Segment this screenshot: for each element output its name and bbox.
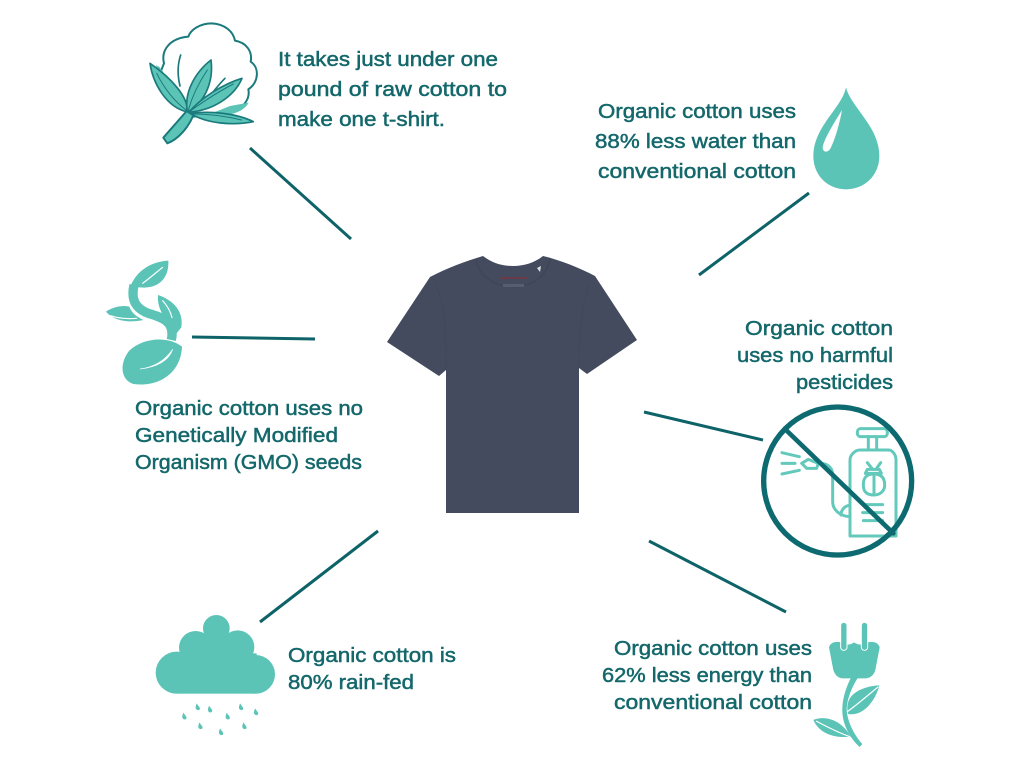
text: water fact [595,100,796,183]
text: GMO fact: Organism (GMO) seeds [135,451,362,474]
text: water fact: 88% less water than [595,130,796,153]
text: GMO fact: Genetically Modified [135,424,338,447]
icon: rain cloud [156,615,275,735]
arrow: water to shirt [699,193,809,275]
text: raw cotton fact: make one t-shirt. [278,108,445,131]
arrow: pesticide to shirt [644,412,763,440]
text: raw cotton fact: It takes just under one [278,48,498,71]
icon: no pesticides spray [764,407,912,555]
text: raw cotton fact: pound of raw cotton to [278,78,507,101]
text: rain-fed fact: Organic cotton is [288,644,456,667]
text: rain-fed fact: 80% rain-fed [288,671,414,694]
text: energy fact: conventional cotton [614,691,812,714]
text: pesticide fact: pesticides [796,371,893,394]
text: GMO fact: Organic cotton uses no [135,397,363,420]
text: water fact: Organic cotton uses [598,100,796,123]
text: water fact: conventional cotton [598,160,796,183]
icon: water drop [813,87,879,189]
text: pesticide fact: uses no harmful [737,344,893,367]
arrow: rain to shirt [260,531,378,622]
arrow: cotton to shirt [250,148,351,239]
icon: seedling [106,261,182,385]
t-shirt [387,256,637,513]
text: energy fact: 62% less energy than [602,664,812,687]
icon: plug plant [813,622,880,747]
text: energy fact [602,637,812,714]
text: GMO fact [135,397,363,474]
text: raw cotton fact [278,48,507,131]
text: pesticide fact [737,317,893,394]
text: energy fact: Organic cotton uses [614,637,812,660]
arrow: energy to shirt [649,541,786,612]
icon: cotton boll [150,23,257,143]
text: pesticide fact: Organic cotton [745,317,893,340]
text: rain-fed fact [288,644,456,694]
arrow: seed to shirt [192,337,315,339]
